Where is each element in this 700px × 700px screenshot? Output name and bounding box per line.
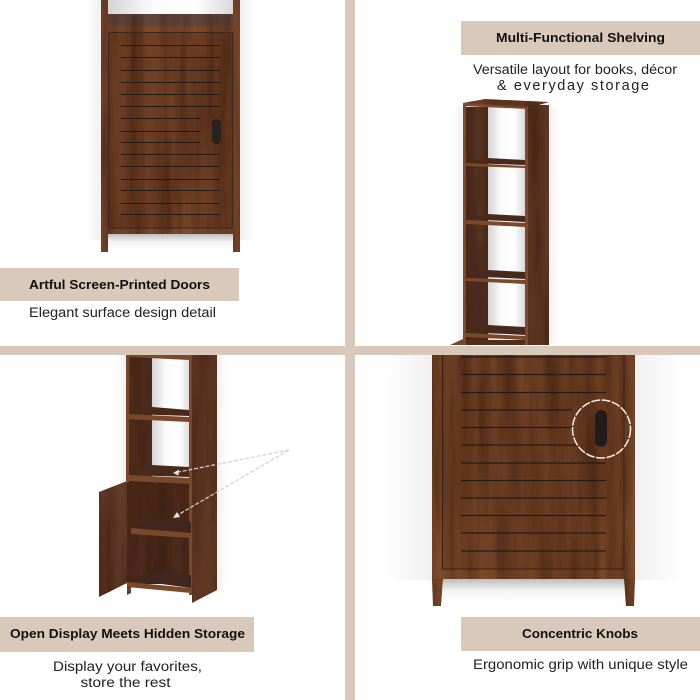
caption: versatile layout: & everyday storage (497, 78, 649, 94)
caption: display your favorites: Display your favorites, (53, 659, 202, 674)
arrows: pointing to shelves (173, 450, 289, 518)
banner: artful screen-printed doors (0, 268, 239, 301)
panel: artful screen-printed doors (0, 0, 256, 320)
caption: ergonomic grip: Ergonomic grip with unique style (473, 657, 688, 672)
illustration: open shelving unit (450, 99, 559, 345)
caption: display your favorites (53, 659, 202, 690)
banner: open display meets hidden storage (0, 617, 254, 652)
illustration: door cabinet close-up (85, 0, 256, 252)
panel: open display meets hidden storage (0, 355, 289, 690)
caption: elegant surface design detail: Elegant surface design detail (29, 305, 216, 320)
caption: display your favorites: store the rest (80, 675, 171, 690)
banner: multi-functional shelving: Multi-Functional Shelving (496, 30, 665, 45)
banner: open display meets hidden storage: Open Display Meets Hidden Storage (10, 626, 245, 641)
illustration: tower with open door (99, 355, 227, 603)
panel: multi-functional shelving (450, 21, 700, 345)
banner: concentric knobs (461, 617, 700, 651)
caption: versatile layout (473, 62, 678, 94)
highlight circle around knob (572, 400, 630, 458)
banner: multi-functional shelving (461, 21, 700, 55)
banner: concentric knobs: Concentric Knobs (522, 626, 638, 641)
banner: artful screen-printed doors: Artful Screen-Printed Doors (29, 277, 210, 292)
caption: versatile layout: Versatile layout for books, décor (473, 62, 678, 77)
panel: concentric knobs (385, 355, 700, 672)
illustration: door close-up with knob (385, 355, 682, 606)
